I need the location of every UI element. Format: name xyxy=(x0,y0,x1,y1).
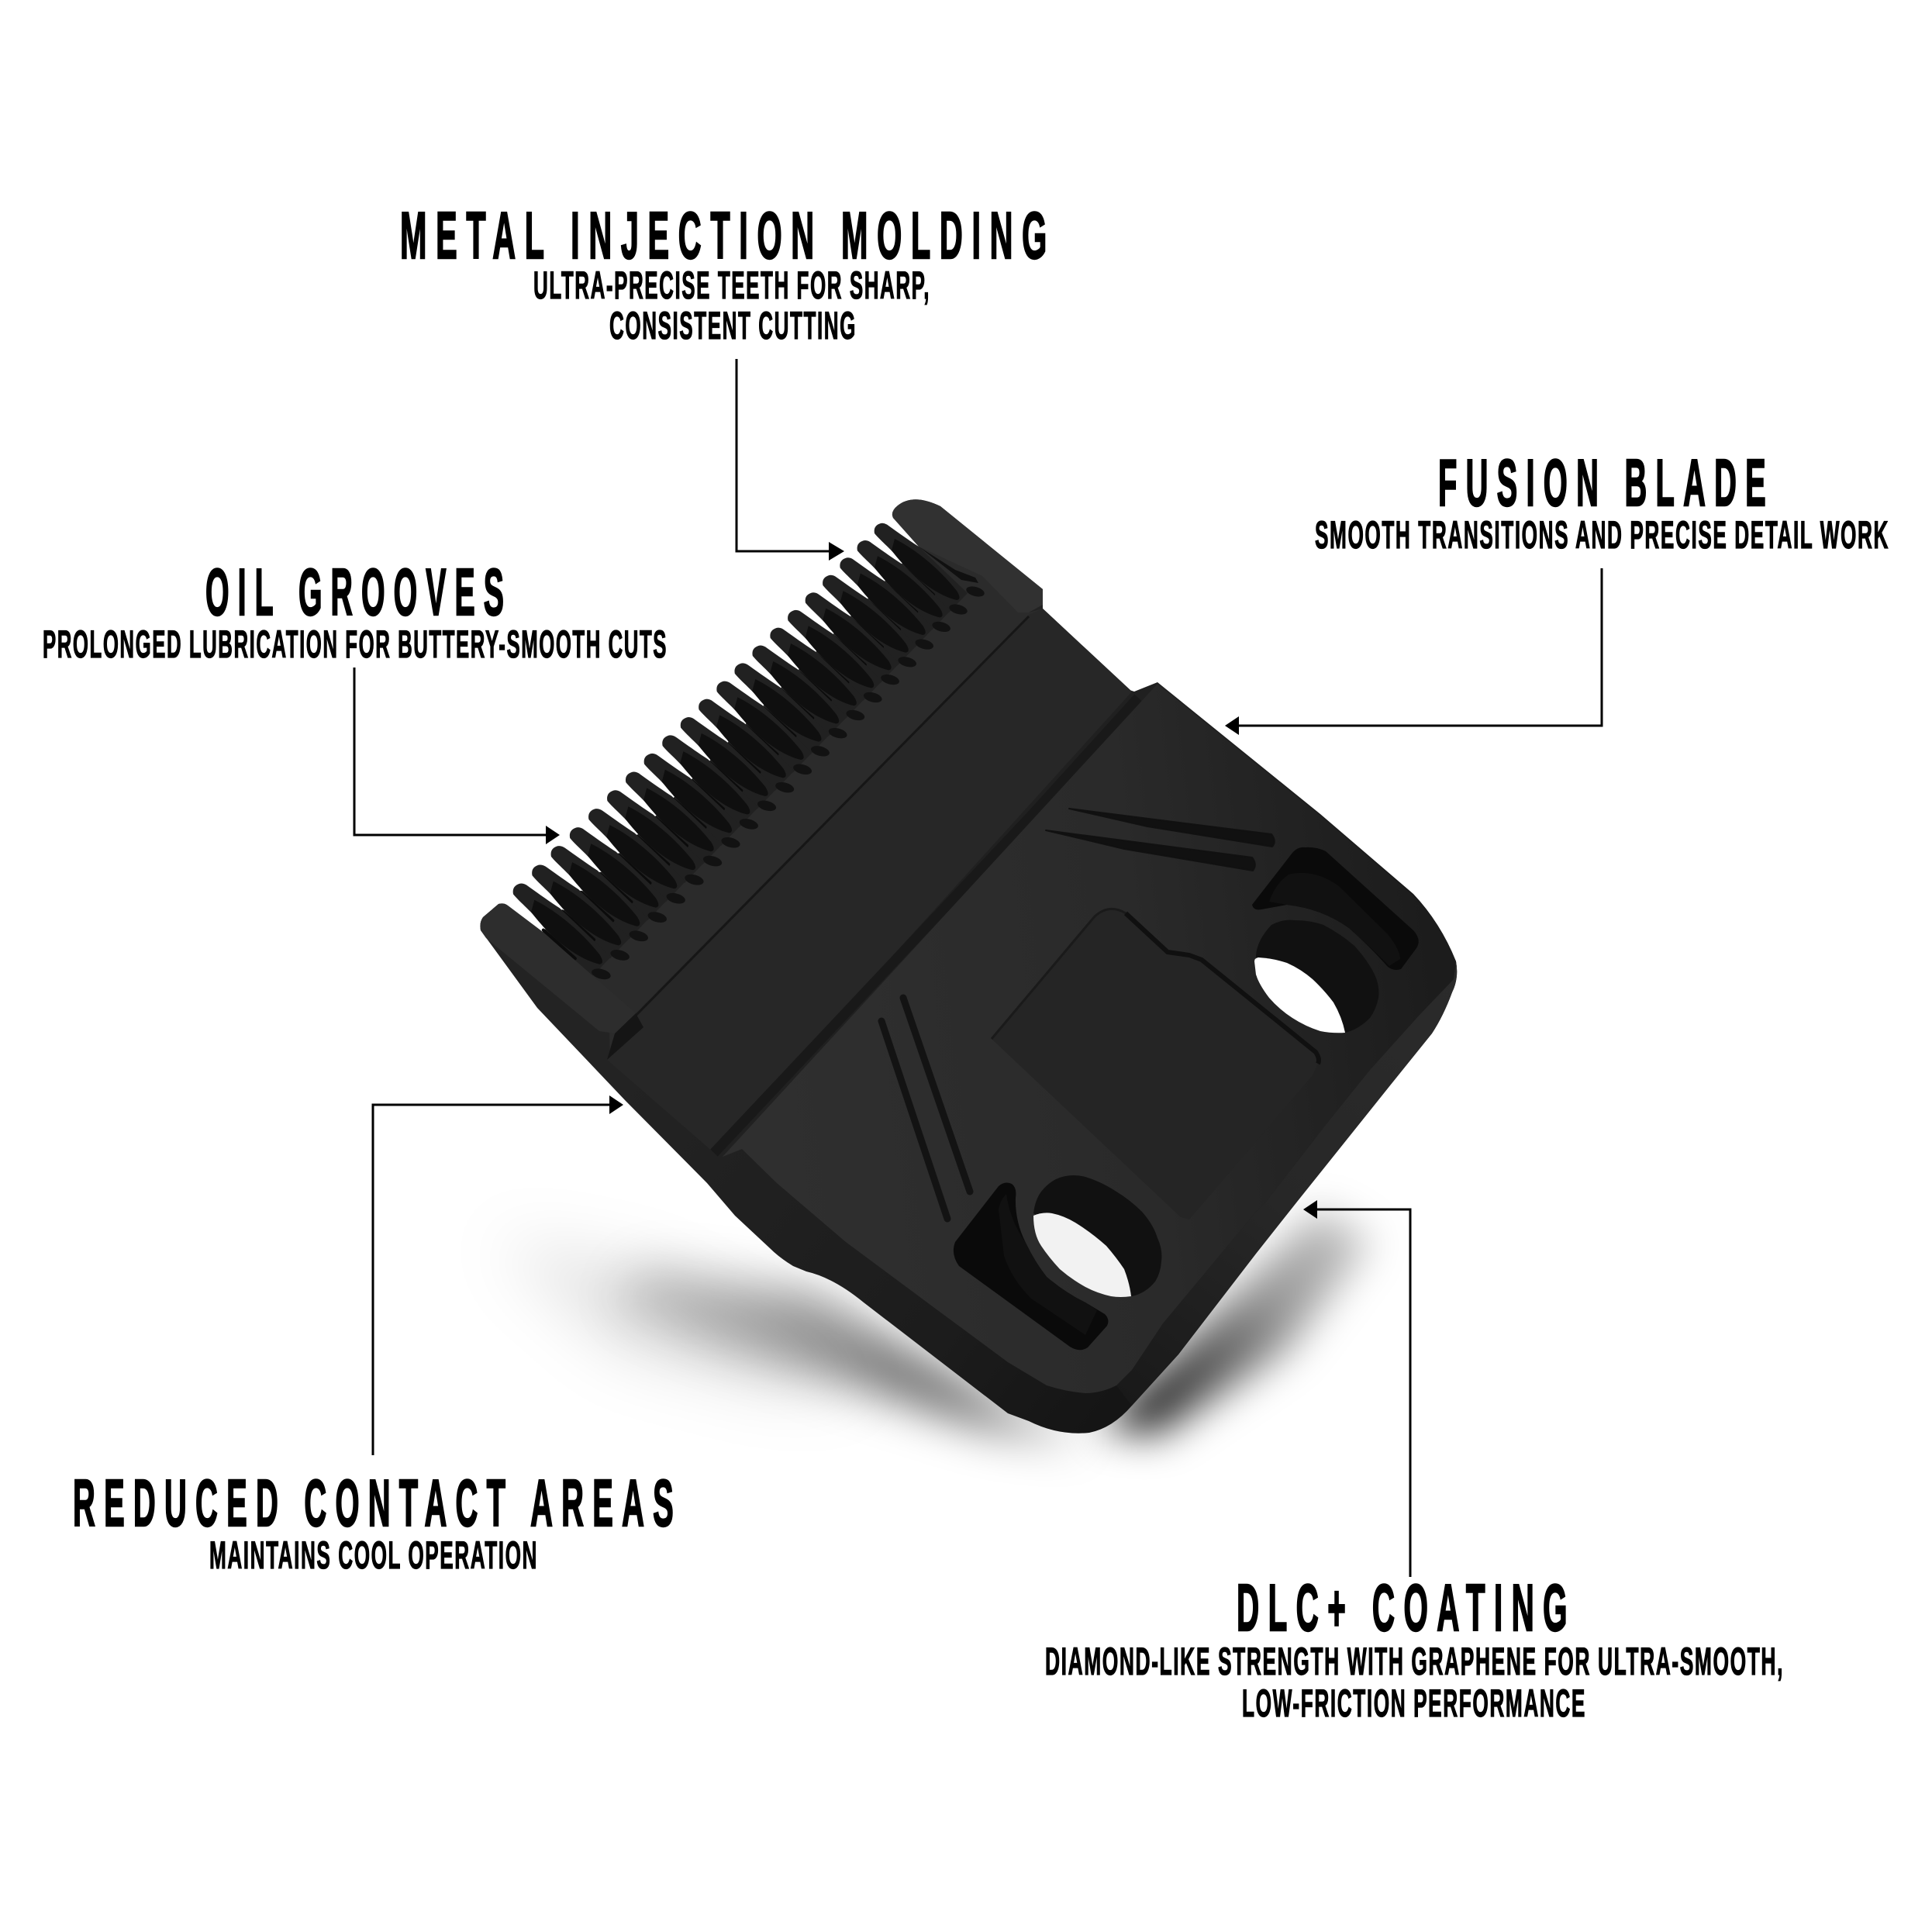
arrow: fusion blade xyxy=(1225,568,1602,735)
left guard block xyxy=(480,903,636,1033)
center groove xyxy=(714,698,1138,1153)
callout: metal injection molding xyxy=(400,199,1056,347)
lower teeth plate xyxy=(607,609,1132,1153)
right guard block xyxy=(892,499,1043,612)
blade shadow left xyxy=(612,1264,1085,1438)
plate slots left xyxy=(881,998,970,1219)
callout: metal injection molding: ULTRA-PRECISE TEETH FOR SHARP, xyxy=(533,264,930,307)
comb teeth xyxy=(513,523,968,982)
arrow: oil grooves xyxy=(354,668,560,844)
plate slots top xyxy=(1046,809,1275,871)
callout: DLC+ coating: DLC+ COATING xyxy=(1237,1571,1576,1645)
callout: reduced contact areas: MAINTAINS COOL OPERATION xyxy=(209,1534,538,1577)
soft outer shadow left xyxy=(496,1240,868,1388)
arrow: DLC+ coating xyxy=(1303,1200,1410,1577)
callout: oil grooves: PROLONGED LUBRICATION FOR BUTTERY-SMOOTH CUTS xyxy=(43,623,668,666)
callout: DLC+ coating xyxy=(1045,1571,1784,1725)
square recess xyxy=(992,909,1319,1220)
callout: metal injection molding: CONSISTENT CUTTING xyxy=(609,304,857,347)
callout: DLC+ coating: LOW-FRICTION PERFORMANCE xyxy=(1242,1682,1586,1725)
lower screw hole xyxy=(1033,1175,1161,1297)
arrow: metal injection molding xyxy=(737,359,844,561)
right rim band xyxy=(1116,961,1457,1406)
blade shadow right xyxy=(1101,1209,1372,1434)
callout: oil grooves: OIL GROOVES xyxy=(205,556,512,630)
blade product image xyxy=(480,499,1457,1433)
shadow beside right guard xyxy=(919,547,985,599)
upper screw hole xyxy=(1254,920,1378,1033)
blade silhouette xyxy=(480,499,1457,1433)
main plate xyxy=(723,684,1456,1393)
shadow under left guard xyxy=(607,1013,643,1060)
text: REDUCED CONTACT AREAS xyxy=(73,1467,682,1540)
teeth plate xyxy=(543,547,1132,1153)
pocket upper right xyxy=(1252,847,1419,970)
arrow: reduced contact areas xyxy=(373,1095,623,1455)
callout: reduced contact areas xyxy=(73,1467,682,1577)
recess inner shadow xyxy=(992,909,1319,1064)
plate step line xyxy=(634,616,1029,1017)
callout: fusion blade xyxy=(1315,447,1889,557)
text: METAL INJECTION MOLDING xyxy=(400,199,1056,273)
pocket lower left xyxy=(954,1183,1108,1350)
callout: oil grooves xyxy=(43,556,668,666)
